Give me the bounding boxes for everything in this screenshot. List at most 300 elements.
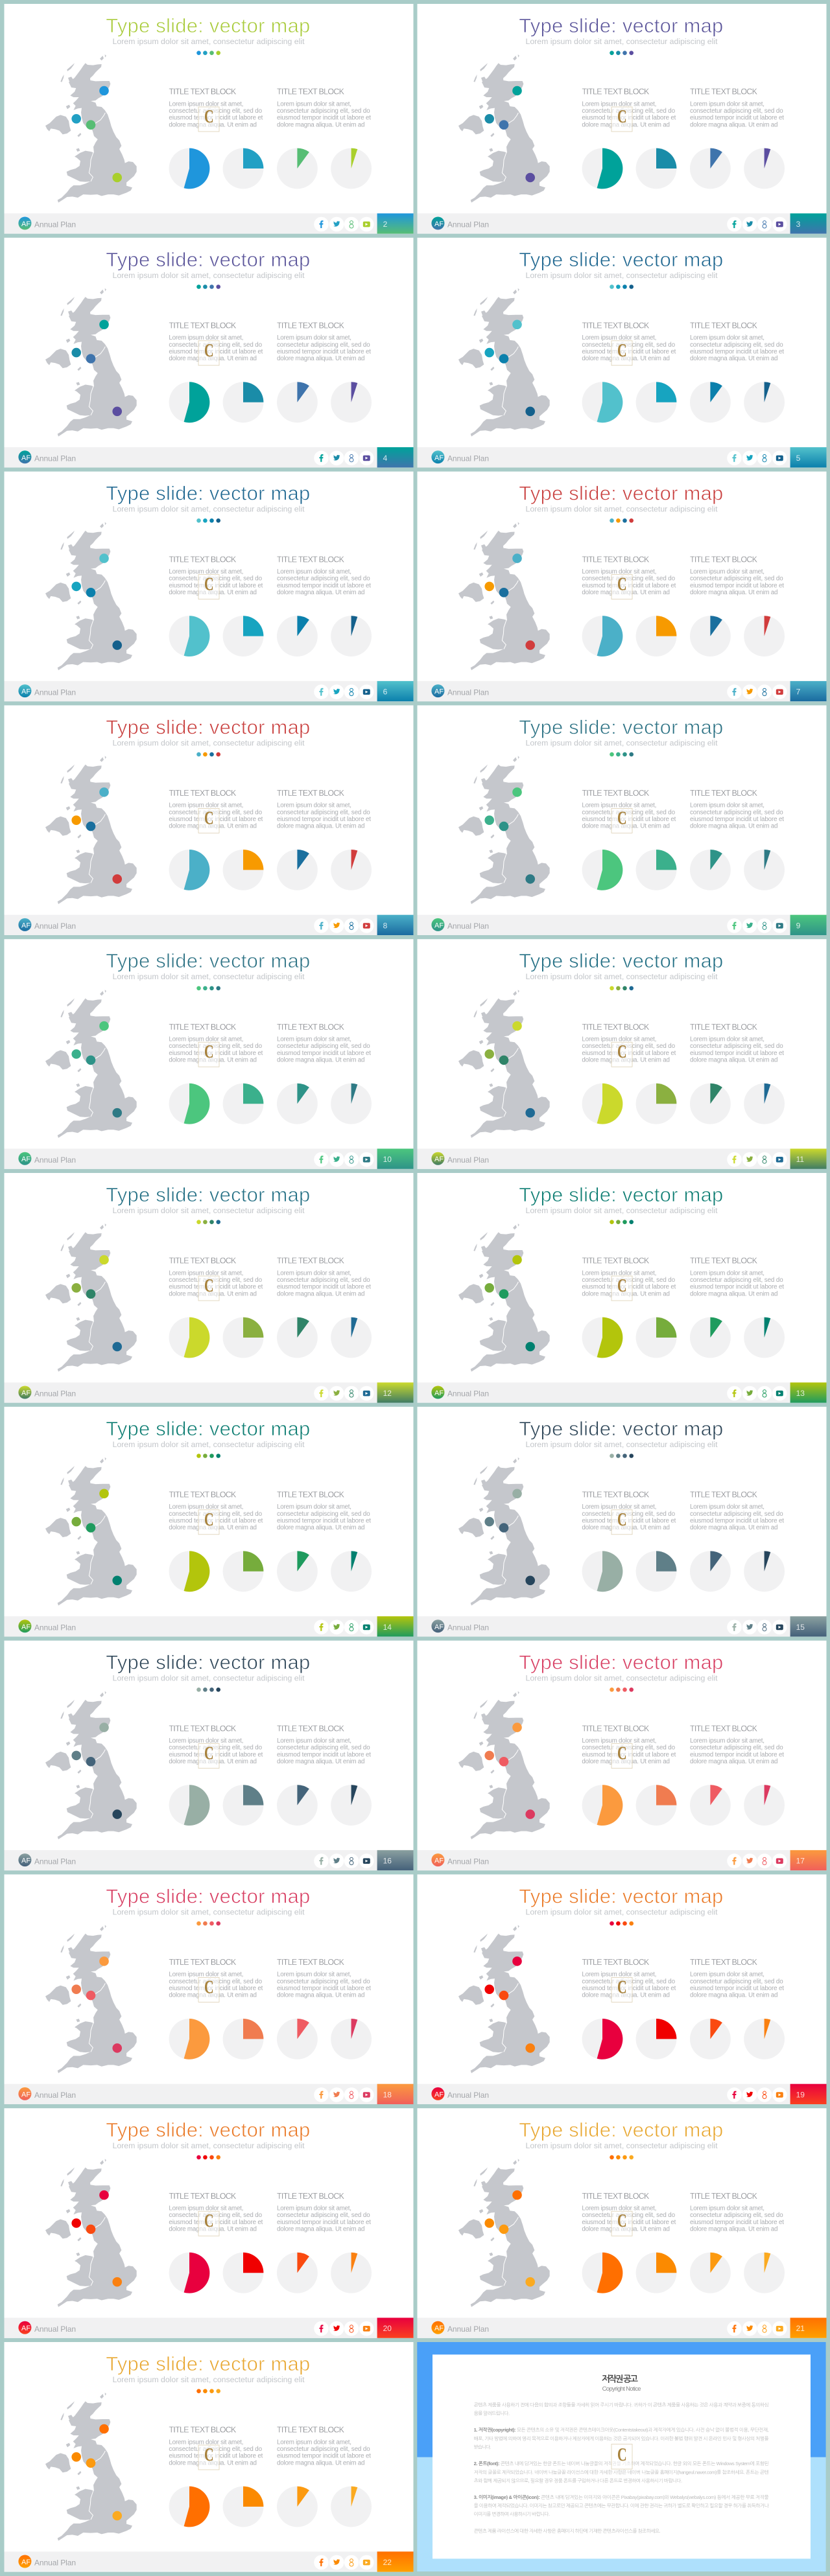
- slide 7: [418, 472, 826, 701]
- text block left: [582, 555, 676, 596]
- text block left: TITLE TEXT BLOCK: [582, 789, 650, 798]
- subtitle: Lorem ipsum dolor sit amet, consectetur adipiscing elit: [113, 1440, 305, 1449]
- title: Type slide: vector map: [106, 1417, 310, 1440]
- text block left: eiusmod tempor incidit ut labore et: [169, 1985, 263, 1992]
- UK map with markers: [45, 1925, 137, 2073]
- slide 21: [418, 2108, 826, 2338]
- pie charts: [169, 850, 372, 890]
- slide 2: [4, 4, 414, 234]
- text block right: TITLE TEXT BLOCK: [277, 1491, 345, 1500]
- blue background upper: [417, 2342, 826, 2457]
- text block right: dolore magna aliqua. Ut enim ad: [690, 823, 778, 830]
- subtitle: Lorem ipsum dolor sit amet, consectetur adipiscing elit: [113, 738, 305, 747]
- social icons: [314, 1386, 374, 1400]
- text block left: Lorem ipsum dolor sit amet,: [169, 1270, 243, 1277]
- text block right: consectetur adipiscing elit, sed do: [277, 342, 370, 349]
- text block left: Lorem ipsum dolor sit amet,: [582, 1503, 656, 1511]
- page number: [790, 915, 826, 935]
- text block left: dolore magna aliqua. Ut enim ad: [169, 355, 257, 362]
- text block right: [690, 2192, 784, 2233]
- text block right: consectetur adipiscing elit, sed do: [690, 1978, 783, 1985]
- pie charts: [582, 1785, 785, 1826]
- UK map with markers: [458, 54, 550, 203]
- UK map with markers: [458, 2159, 550, 2307]
- pie charts: [169, 1317, 372, 1358]
- pie charts: [169, 2253, 372, 2293]
- colour dots: [610, 51, 634, 55]
- text block left: Lorem ipsum dolor sit amet,: [582, 1737, 656, 1745]
- text block right: [690, 1958, 784, 1999]
- text block right: consectetur adipiscing elit, sed do: [690, 1511, 783, 1518]
- text block left: Lorem ipsum dolor sit amet,: [582, 568, 656, 575]
- social icons: [314, 2087, 374, 2102]
- brand name: Annual Plan: [34, 922, 76, 931]
- text block right: Lorem ipsum dolor sit amet,: [277, 802, 351, 809]
- text block right: dolore magna aliqua. Ut enim ad: [277, 1056, 364, 1063]
- slide panel: [418, 1874, 826, 2104]
- text block left: Lorem ipsum dolor sit amet,: [169, 1036, 243, 1043]
- text block left: consectetur adipiscing elit, sed do: [582, 1043, 676, 1050]
- text block left: Lorem ipsum dolor sit amet,: [169, 1737, 243, 1745]
- logo: AF: [21, 220, 30, 228]
- text block left: TITLE TEXT BLOCK: [582, 1724, 650, 1733]
- slide panel: [4, 1641, 414, 1870]
- logo: AF: [21, 1155, 30, 1163]
- slide panel: [418, 939, 826, 1169]
- colour dots: [610, 1220, 634, 1224]
- text block left: consectetur adipiscing elit, sed do: [582, 342, 676, 349]
- text block right: Lorem ipsum dolor sit amet,: [277, 1503, 351, 1511]
- text block left: consectetur adipiscing elit, sed do: [582, 575, 676, 583]
- text block right: eiusmod tempor incidit ut labore et: [690, 2219, 784, 2226]
- watermark: C: [617, 340, 627, 361]
- title: Type slide: vector map: [519, 14, 723, 37]
- text block left: eiusmod tempor incidit ut labore et: [582, 1284, 676, 1291]
- logo: AF: [21, 688, 30, 696]
- UK map with markers: [45, 756, 137, 904]
- watermark: C: [617, 808, 627, 828]
- subtitle: Lorem ipsum dolor sit amet, consectetur adipiscing elit: [525, 972, 718, 981]
- page number: 15: [796, 1623, 805, 1632]
- text block left: dolore magna aliqua. Ut enim ad: [582, 121, 670, 128]
- text block right: [277, 789, 371, 830]
- logo: [431, 1619, 444, 1632]
- text block left: dolore magna aliqua. Ut enim ad: [582, 589, 670, 596]
- text block right: consectetur adipiscing elit, sed do: [277, 809, 370, 816]
- page number: 12: [383, 1389, 392, 1398]
- page number: [377, 447, 414, 467]
- watermark: C: [617, 1977, 627, 1997]
- page number: 10: [383, 1155, 392, 1164]
- logo: AF: [21, 2559, 30, 2566]
- colour dots: [196, 986, 220, 990]
- text block right: [277, 321, 371, 362]
- text block right: Lorem ipsum dolor sit amet,: [690, 1737, 765, 1745]
- social icons: [314, 1152, 374, 1166]
- slide panel: [418, 238, 826, 467]
- pie charts: [169, 2487, 372, 2527]
- slide 3: [418, 4, 826, 234]
- section 2 font: 츠와 함께 제공되지 않으므로, 필요할 경우 정품 폰트를 구입하거나 다른 폰트로 변경하여 사용하시기 바랍니다.: [474, 2478, 682, 2483]
- text block right: dolore magna aliqua. Ut enim ad: [690, 1992, 778, 1999]
- text block right: Lorem ipsum dolor sit amet,: [690, 2205, 765, 2212]
- colour dots: [610, 284, 634, 289]
- watermark: [611, 1977, 632, 2002]
- title: Type slide: vector map: [106, 1885, 310, 1907]
- text block right: eiusmod tempor incidit ut labore et: [690, 816, 784, 823]
- intro paragraph: [474, 2402, 769, 2416]
- brand name: Annual Plan: [447, 1623, 489, 1632]
- text block left: eiusmod tempor incidit ut labore et: [582, 1050, 676, 1057]
- page number: [790, 1850, 826, 1870]
- title: Type slide: vector map: [519, 1885, 723, 1907]
- text block left: [582, 789, 676, 830]
- logo: AF: [434, 2091, 444, 2098]
- text block right: eiusmod tempor incidit ut labore et: [277, 1985, 371, 1992]
- text block left: eiusmod tempor incidit ut labore et: [169, 348, 263, 355]
- text block left: Lorem ipsum dolor sit amet,: [582, 334, 656, 342]
- text block right: TITLE TEXT BLOCK: [277, 1023, 345, 1032]
- page number: [377, 2551, 414, 2572]
- text block right: eiusmod tempor incidit ut labore et: [277, 115, 371, 122]
- title: Type slide: vector map: [106, 2118, 310, 2141]
- watermark: [198, 1276, 219, 1301]
- slide panel: [418, 1641, 826, 1870]
- section 2 font: 2. 폰트(font): 콘텐츠 내에 담겨있는 한글 폰트는 네이버 나눔글꼴의 저작권을 기초하여 제작되었습니다. 한글 외의 모든 폰트는 Windows System에 포함된: [474, 2461, 769, 2466]
- text block left: TITLE TEXT BLOCK: [169, 2192, 237, 2201]
- text block left: [169, 789, 263, 830]
- text block left: eiusmod tempor incidit ut labore et: [169, 582, 263, 589]
- text block left: [582, 1023, 676, 1064]
- text block left: eiusmod tempor incidit ut labore et: [169, 1284, 263, 1291]
- text block right: consectetur adipiscing elit, sed do: [277, 1978, 370, 1985]
- pie charts: [169, 1084, 372, 1124]
- text block left: TITLE TEXT BLOCK: [169, 1023, 237, 1032]
- brand name: Annual Plan: [34, 1857, 76, 1866]
- logo: AF: [21, 1389, 30, 1397]
- section 1 copyright: 받습니다.: [474, 2444, 492, 2450]
- social icons: [727, 451, 787, 465]
- text block left: consectetur adipiscing elit, sed do: [582, 2212, 676, 2219]
- text block right: [690, 789, 784, 830]
- text block left: [169, 555, 263, 596]
- slide 18: [4, 1874, 414, 2104]
- watermark: [611, 808, 632, 833]
- brand name: Annual Plan: [34, 220, 76, 229]
- text block right: consectetur adipiscing elit, sed do: [690, 108, 783, 115]
- text block left: dolore magna aliqua. Ut enim ad: [582, 1290, 670, 1297]
- text block right: [690, 1491, 784, 1531]
- text block left: dolore magna aliqua. Ut enim ad: [169, 1524, 257, 1531]
- text block right: TITLE TEXT BLOCK: [277, 2426, 345, 2435]
- title: Type slide: vector map: [519, 1651, 723, 1674]
- section 3 image and icon: [474, 2494, 770, 2517]
- text block right: consectetur adipiscing elit, sed do: [277, 2212, 370, 2219]
- slide 5: [418, 238, 826, 467]
- pie charts: [582, 616, 785, 656]
- text block left: consectetur adipiscing elit, sed do: [582, 1511, 676, 1518]
- subtitle: Lorem ipsum dolor sit amet, consectetur adipiscing elit: [525, 1206, 718, 1215]
- text block right: TITLE TEXT BLOCK: [277, 87, 345, 97]
- text block right: eiusmod tempor incidit ut labore et: [277, 1050, 371, 1057]
- slide 17: [418, 1641, 826, 1870]
- watermark: [611, 1743, 632, 1769]
- logo: [18, 1386, 31, 1398]
- text block left: [582, 87, 676, 128]
- subtitle: Lorem ipsum dolor sit amet, consectetur adipiscing elit: [525, 738, 718, 747]
- text block right: eiusmod tempor incidit ut labore et: [690, 1284, 784, 1291]
- text block right: TITLE TEXT BLOCK: [690, 555, 758, 564]
- subtitle: Lorem ipsum dolor sit amet, consectetur adipiscing elit: [113, 505, 305, 514]
- subtitle: Lorem ipsum dolor sit amet, consectetur adipiscing elit: [525, 1440, 718, 1449]
- text block right: TITLE TEXT BLOCK: [690, 1491, 758, 1500]
- closing line: 콘텐츠 제품 라이선스에 대한 자세한 사항은 홈페이지 하단에 기재한 콘텐츠라이선스를 참조하세요.: [474, 2528, 661, 2534]
- slide panel: [4, 1874, 414, 2104]
- text block left: TITLE TEXT BLOCK: [582, 87, 650, 97]
- text block left: consectetur adipiscing elit, sed do: [169, 809, 263, 816]
- watermark: [611, 107, 632, 132]
- watermark: [198, 574, 219, 599]
- text block left: dolore magna aliqua. Ut enim ad: [582, 355, 670, 362]
- text block right: consectetur adipiscing elit, sed do: [277, 1745, 370, 1752]
- social icons: [314, 1620, 374, 1634]
- subtitle: Lorem ipsum dolor sit amet, consectetur adipiscing elit: [113, 2141, 305, 2150]
- text block left: TITLE TEXT BLOCK: [582, 1491, 650, 1500]
- text block left: [169, 321, 263, 362]
- slide panel: [418, 1173, 826, 1403]
- logo: AF: [434, 220, 444, 228]
- text block right: Lorem ipsum dolor sit amet,: [277, 100, 351, 108]
- text block left: consectetur adipiscing elit, sed do: [169, 1277, 263, 1284]
- colour dots: [610, 752, 634, 756]
- text block right: [277, 1023, 371, 1064]
- text block right: Lorem ipsum dolor sit amet,: [277, 2205, 351, 2212]
- text block right: [690, 555, 784, 596]
- section 3 image and icon: 을 이용하여 제작되었습니다. 이미지는 참고로만 제공되고 콘텐츠에는 무관합니다. 이에 관한 권리는 귀하가 별도로 확인하고 필요할 경우 허가를 취득하거나: [474, 2503, 770, 2509]
- pie charts: [169, 616, 372, 656]
- watermark: [198, 107, 219, 132]
- text block right: dolore magna aliqua. Ut enim ad: [277, 1992, 364, 1999]
- logo: [18, 1152, 31, 1165]
- page number: 5: [796, 454, 801, 463]
- slide 22: [4, 2342, 414, 2572]
- text block left: consectetur adipiscing elit, sed do: [169, 575, 263, 583]
- text block left: [582, 1958, 676, 1999]
- colour dots: [196, 1220, 220, 1224]
- brand name: Annual Plan: [447, 1155, 489, 1165]
- text block right: dolore magna aliqua. Ut enim ad: [690, 2225, 778, 2233]
- text block right: consectetur adipiscing elit, sed do: [277, 1277, 370, 1284]
- text block left: eiusmod tempor incidit ut labore et: [169, 1751, 263, 1758]
- text block right: [277, 1491, 371, 1531]
- logo: [18, 918, 31, 931]
- page number: 2: [383, 220, 388, 229]
- text block right: consectetur adipiscing elit, sed do: [690, 809, 783, 816]
- subtitle: Lorem ipsum dolor sit amet, consectetur adipiscing elit: [113, 1206, 305, 1215]
- slide 15: [418, 1407, 826, 1636]
- text block left: dolore magna aliqua. Ut enim ad: [169, 121, 257, 128]
- logo: AF: [21, 922, 30, 929]
- text block left: [582, 1491, 676, 1531]
- text block right: eiusmod tempor incidit ut labore et: [690, 348, 784, 355]
- text block left: TITLE TEXT BLOCK: [169, 1257, 237, 1266]
- page number: 4: [383, 454, 388, 463]
- social icons: [727, 1853, 787, 1868]
- logo: [18, 1853, 31, 1866]
- page number: 6: [383, 688, 388, 697]
- text block left: dolore magna aliqua. Ut enim ad: [169, 1758, 257, 1765]
- social icons: [314, 2321, 374, 2336]
- colour dots: [196, 518, 220, 523]
- text block left: consectetur adipiscing elit, sed do: [169, 2446, 263, 2453]
- text block left: [582, 1724, 676, 1765]
- text block left: [169, 2426, 263, 2466]
- text block left: TITLE TEXT BLOCK: [169, 1724, 237, 1733]
- colour dots: [196, 2155, 220, 2159]
- text block left: [169, 1023, 263, 1064]
- logo: [431, 216, 444, 229]
- watermark: [198, 1743, 219, 1769]
- social icons: [727, 684, 787, 699]
- text block right: [690, 1023, 784, 1064]
- watermark: C: [204, 2211, 214, 2231]
- watermark: C: [617, 2445, 627, 2465]
- social icons: [727, 918, 787, 933]
- slide panel: [418, 705, 826, 935]
- text block left: [169, 1257, 263, 1297]
- text block right: dolore magna aliqua. Ut enim ad: [690, 1056, 778, 1063]
- page number: 11: [796, 1155, 804, 1164]
- page number: [377, 915, 414, 935]
- brand name: Annual Plan: [447, 2091, 489, 2100]
- text block right: [277, 87, 371, 128]
- title: Type slide: vector map: [519, 1183, 723, 1206]
- brand name: Annual Plan: [447, 1389, 489, 1398]
- text block left: [169, 87, 263, 128]
- text block left: TITLE TEXT BLOCK: [582, 2192, 650, 2201]
- text block right: Lorem ipsum dolor sit amet,: [690, 100, 765, 108]
- text block left: dolore magna aliqua. Ut enim ad: [582, 2225, 670, 2233]
- subtitle: Lorem ipsum dolor sit amet, consectetur adipiscing elit: [113, 37, 305, 46]
- text block right: dolore magna aliqua. Ut enim ad: [690, 1290, 778, 1297]
- watermark: C: [204, 1276, 214, 1296]
- watermark: C: [204, 340, 214, 361]
- logo: [18, 2087, 31, 2100]
- text block left: eiusmod tempor incidit ut labore et: [582, 348, 676, 355]
- logo: AF: [21, 2325, 30, 2332]
- text block right: dolore magna aliqua. Ut enim ad: [277, 589, 364, 596]
- brand name: Annual Plan: [34, 1623, 76, 1632]
- watermark: C: [617, 1509, 627, 1530]
- slide panel: [4, 705, 414, 935]
- watermark: [611, 1042, 632, 1067]
- text block left: TITLE TEXT BLOCK: [582, 555, 650, 564]
- colour dots: [196, 752, 220, 756]
- page number: [377, 1850, 414, 1870]
- text block left: dolore magna aliqua. Ut enim ad: [169, 589, 257, 596]
- page number: [377, 213, 414, 234]
- text block right: Lorem ipsum dolor sit amet,: [277, 1737, 351, 1745]
- text block right: TITLE TEXT BLOCK: [277, 789, 345, 798]
- page number: [790, 1616, 826, 1636]
- watermark: [611, 340, 632, 366]
- text block left: TITLE TEXT BLOCK: [582, 1257, 650, 1266]
- text block left: eiusmod tempor incidit ut labore et: [582, 1751, 676, 1758]
- brand name: Annual Plan: [447, 688, 489, 697]
- text block left: consectetur adipiscing elit, sed do: [169, 108, 263, 115]
- text block right: dolore magna aliqua. Ut enim ad: [690, 1758, 778, 1765]
- text block left: consectetur adipiscing elit, sed do: [582, 1277, 676, 1284]
- colour dots: [610, 518, 634, 523]
- subtitle: Lorem ipsum dolor sit amet, consectetur adipiscing elit: [113, 972, 305, 981]
- UK map with markers: [458, 1691, 550, 1839]
- text block left: Lorem ipsum dolor sit amet,: [169, 568, 243, 575]
- notice subtitle: Copyright Notice: [602, 2385, 641, 2393]
- text block right: Lorem ipsum dolor sit amet,: [690, 1270, 765, 1277]
- subtitle: Lorem ipsum dolor sit amet, consectetur adipiscing elit: [525, 505, 718, 514]
- slide panel: [4, 472, 414, 701]
- pie charts: [169, 382, 372, 423]
- page number: [790, 1382, 826, 1403]
- watermark: C: [617, 1042, 627, 1062]
- brand name: Annual Plan: [447, 454, 489, 463]
- watermark: C: [617, 1743, 627, 1764]
- social icons: [727, 2087, 787, 2102]
- logo: AF: [434, 2325, 444, 2332]
- text block right: TITLE TEXT BLOCK: [690, 789, 758, 798]
- watermark: [198, 1509, 219, 1535]
- text block right: consectetur adipiscing elit, sed do: [690, 575, 783, 583]
- text block right: TITLE TEXT BLOCK: [690, 2192, 758, 2201]
- text block left: Lorem ipsum dolor sit amet,: [582, 1971, 656, 1978]
- UK map with markers: [458, 1457, 550, 1605]
- title: Type slide: vector map: [519, 248, 723, 271]
- pie charts: [169, 2019, 372, 2060]
- brand name: Annual Plan: [34, 454, 76, 463]
- text block left: dolore magna aliqua. Ut enim ad: [169, 1992, 257, 1999]
- text block right: [690, 1257, 784, 1297]
- text block right: consectetur adipiscing elit, sed do: [277, 2446, 370, 2453]
- text block left: dolore magna aliqua. Ut enim ad: [169, 2459, 257, 2466]
- text block right: consectetur adipiscing elit, sed do: [690, 1043, 783, 1050]
- text block left: consectetur adipiscing elit, sed do: [169, 342, 263, 349]
- colour dots: [196, 1454, 220, 1458]
- logo: [431, 684, 444, 697]
- text block left: Lorem ipsum dolor sit amet,: [169, 2439, 243, 2446]
- text block right: dolore magna aliqua. Ut enim ad: [277, 355, 364, 362]
- text block right: dolore magna aliqua. Ut enim ad: [690, 589, 778, 596]
- text block right: Lorem ipsum dolor sit amet,: [277, 1971, 351, 1978]
- section 1 copyright: 배포, 기타 방법에 의하여 영리 목적으로 이용하거나 제삼자에게 이용하는 것은 금지되어 있습니다. 이러한 불법 행위 발견 시 온라인 민사 및 형사상의 처벌을: [474, 2435, 769, 2442]
- UK map with markers: [458, 288, 550, 436]
- watermark: C: [617, 107, 627, 127]
- brand name: Annual Plan: [34, 2559, 76, 2568]
- text block right: consectetur adipiscing elit, sed do: [690, 342, 783, 349]
- logo: AF: [434, 1857, 444, 1865]
- text block right: Lorem ipsum dolor sit amet,: [277, 2439, 351, 2446]
- logo: [18, 1619, 31, 1632]
- text block right: [277, 2426, 371, 2466]
- text block left: eiusmod tempor incidit ut labore et: [582, 1985, 676, 1992]
- text block left: Lorem ipsum dolor sit amet,: [582, 1270, 656, 1277]
- slide 14: [4, 1407, 414, 1636]
- text block right: [277, 555, 371, 596]
- title: Type slide: vector map: [519, 2118, 723, 2141]
- text block left: [169, 1491, 263, 1531]
- subtitle: Lorem ipsum dolor sit amet, consectetur adipiscing elit: [525, 1907, 718, 1916]
- text block right: TITLE TEXT BLOCK: [690, 1958, 758, 1967]
- text block right: TITLE TEXT BLOCK: [277, 555, 345, 564]
